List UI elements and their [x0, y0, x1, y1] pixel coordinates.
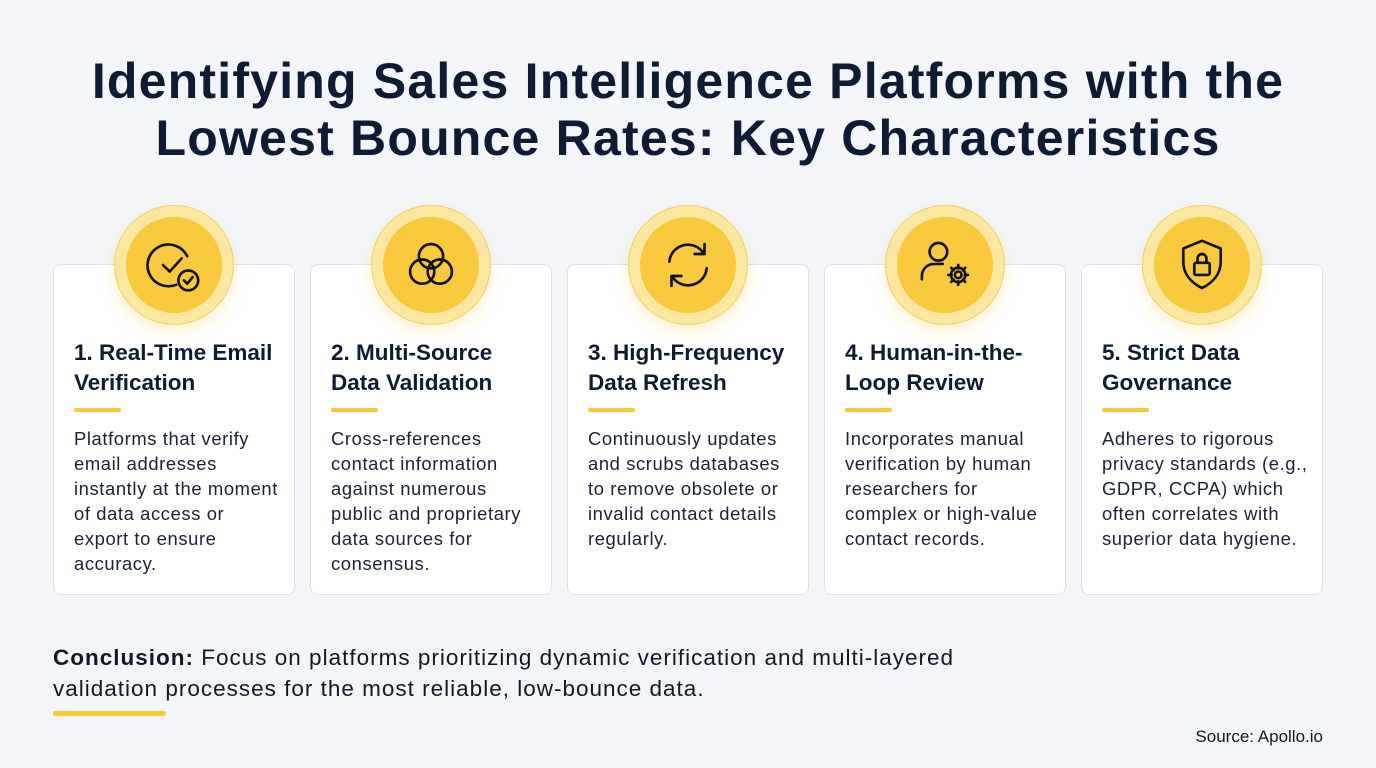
conclusion underline: [53, 711, 166, 716]
card 5 text: often correlates with: [1102, 503, 1279, 524]
card 3 heading: [588, 340, 784, 395]
card 1 text: export to ensure: [74, 528, 217, 549]
card 5 text: superior data hygiene.: [1102, 528, 1297, 549]
conclusion text: Conclusion: Focus on platforms prioritizing dynamic verification and multi-layered: [53, 645, 954, 670]
card 4 text: Incorporates manual: [845, 428, 1024, 449]
card 2 text: Cross-references: [331, 428, 482, 449]
card 3 text: to remove obsolete or: [588, 478, 778, 499]
card 3 underline: [588, 408, 635, 412]
card 3 text: [588, 428, 780, 549]
card 2 heading: 2. Multi-Source: [331, 340, 492, 365]
icon: shield lock: [1142, 205, 1262, 325]
card 4 text: researchers for: [845, 478, 978, 499]
card 1 heading: Verification: [74, 370, 195, 395]
card 5 heading: Governance: [1102, 370, 1232, 395]
card 2 heading: [331, 340, 492, 395]
source: Source: Apollo.io: [1195, 727, 1323, 746]
card 3 text: regularly.: [588, 528, 668, 549]
card 4 heading: [845, 340, 1022, 395]
card 5 underline: [1102, 408, 1149, 412]
title: [92, 53, 1284, 166]
card 3 text: and scrubs databases: [588, 453, 780, 474]
card 2 text: data sources for: [331, 528, 472, 549]
card 3 heading: 3. High-Frequency: [588, 340, 784, 365]
card 4 heading: 4. Human-in-the-: [845, 340, 1022, 365]
title: Lowest Bounce Rates: Key Characteristics: [155, 110, 1221, 166]
card 5 heading: [1102, 340, 1240, 395]
card 2 text: contact information: [331, 453, 498, 474]
card 4 text: [845, 428, 1038, 549]
card 4 text: contact records.: [845, 528, 985, 549]
card 4 text: verification by human: [845, 453, 1031, 474]
card 5 text: privacy standards (e.g.,: [1102, 453, 1308, 474]
card 2 text: against numerous: [331, 478, 487, 499]
card 3 text: invalid contact details: [588, 503, 777, 524]
icon: check circle: [114, 205, 234, 325]
card 2 text: public and proprietary: [331, 503, 521, 524]
panel: card 2: [310, 264, 552, 595]
card 2 underline: [331, 408, 378, 412]
panel: card 3: [567, 264, 809, 595]
card 1 underline: [74, 408, 121, 412]
card 1 text: [74, 428, 278, 574]
conclusion text: [53, 645, 954, 701]
card 1 text: accuracy.: [74, 553, 157, 574]
icon: refresh: [628, 205, 748, 325]
card 1 text: Platforms that verify: [74, 428, 249, 449]
card 2 text: [331, 428, 521, 574]
panel: card 5: [1081, 264, 1323, 595]
card 4 underline: [845, 408, 892, 412]
card 2 text: consensus.: [331, 553, 430, 574]
card 1 text: of data access or: [74, 503, 224, 524]
card 1 heading: [74, 340, 272, 395]
panel: card 4: [824, 264, 1066, 595]
title: Identifying Sales Intelligence Platforms with the: [92, 53, 1284, 109]
icon: user gear: [885, 205, 1005, 325]
card 5 text: [1102, 428, 1308, 549]
card 5 heading: 5. Strict Data: [1102, 340, 1240, 365]
icon: venn circles: [371, 205, 491, 325]
card 4 heading: Loop Review: [845, 370, 984, 395]
card 2 heading: Data Validation: [331, 370, 492, 395]
card 1 text: instantly at the moment: [74, 478, 278, 499]
card 1 heading: 1. Real-Time Email: [74, 340, 272, 365]
panel: card 1: [53, 264, 295, 595]
card 1 text: email addresses: [74, 453, 217, 474]
conclusion text: validation processes for the most reliable, low-bounce data.: [53, 676, 705, 701]
card 3 heading: Data Refresh: [588, 370, 727, 395]
card 5 text: GDPR, CCPA) which: [1102, 478, 1284, 499]
card 5 text: Adheres to rigorous: [1102, 428, 1274, 449]
card 3 text: Continuously updates: [588, 428, 777, 449]
card 4 text: complex or high-value: [845, 503, 1038, 524]
